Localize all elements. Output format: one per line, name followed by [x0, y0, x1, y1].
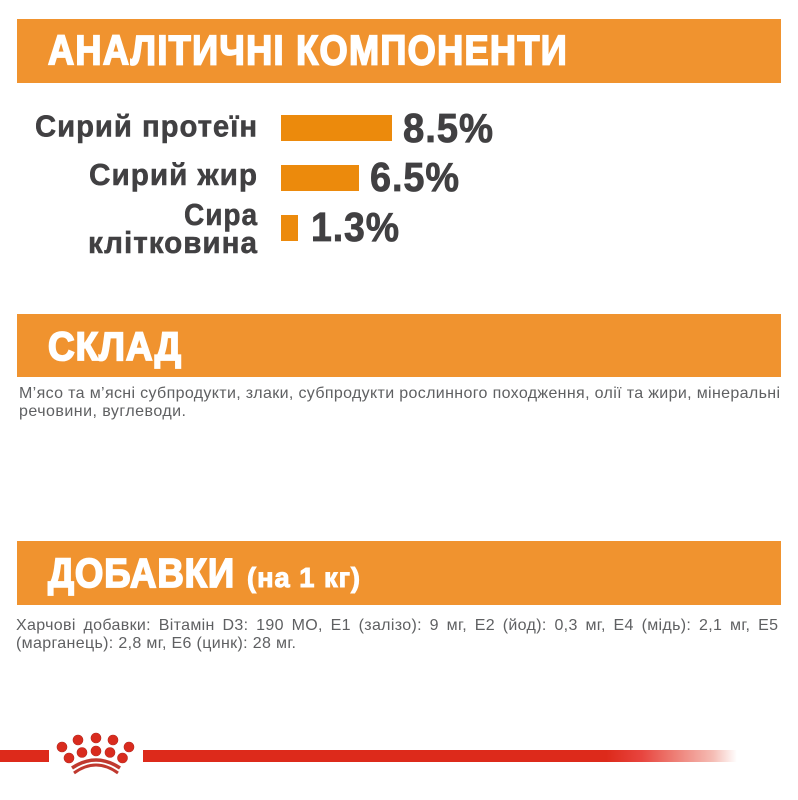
panel: composition heading: СКЛАД — [48, 325, 182, 369]
label: crude fibre: Сира — [184, 197, 258, 232]
bar: crude fibre — [281, 215, 298, 241]
footer brand line — [0, 733, 737, 773]
panel: additives heading: ДОБАВКИ — [48, 550, 235, 596]
bar: crude fat — [281, 165, 359, 191]
panel: analytical components chart — [35, 105, 494, 260]
panel: analytical components heading — [17, 19, 781, 83]
text block: composition: М’ясо та м’ясні субпродукти, злаки, субпродукти рослинного походження, олії та жири, мінеральні — [19, 385, 780, 402]
panel: additives heading — [17, 541, 781, 605]
icon: Royal Canin crown — [57, 733, 134, 773]
text block: composition: речовини, вуглеводи. — [19, 403, 186, 420]
text block: additives: Харчові добавки: Вітамін D3: 190 МО, Е1 (залізо): 9 мг, Е2 (йод): 0,3 мг, Е4 (мідь): 2,1 мг, Е5 — [16, 617, 778, 634]
label: crude fibre: клітковина — [88, 225, 258, 260]
panel: additives heading: (на 1 кг) — [247, 562, 361, 593]
value: crude fibre: 1.3% — [311, 204, 400, 250]
label: crude protein: Сирий протеїн — [35, 108, 258, 144]
value: crude fat: 6.5% — [370, 154, 460, 200]
value: crude protein: 8.5% — [403, 105, 494, 151]
panel: analytical components heading: АНАЛІТИЧНІ КОМПОНЕНТИ — [48, 26, 568, 74]
label: crude fat: Сирий жир — [89, 157, 258, 192]
text block: additives: (марганець): 2,8 мг, Е6 (цинк): 28 мг. — [16, 635, 296, 652]
bar: crude protein — [281, 115, 392, 141]
panel: composition heading — [17, 314, 781, 377]
